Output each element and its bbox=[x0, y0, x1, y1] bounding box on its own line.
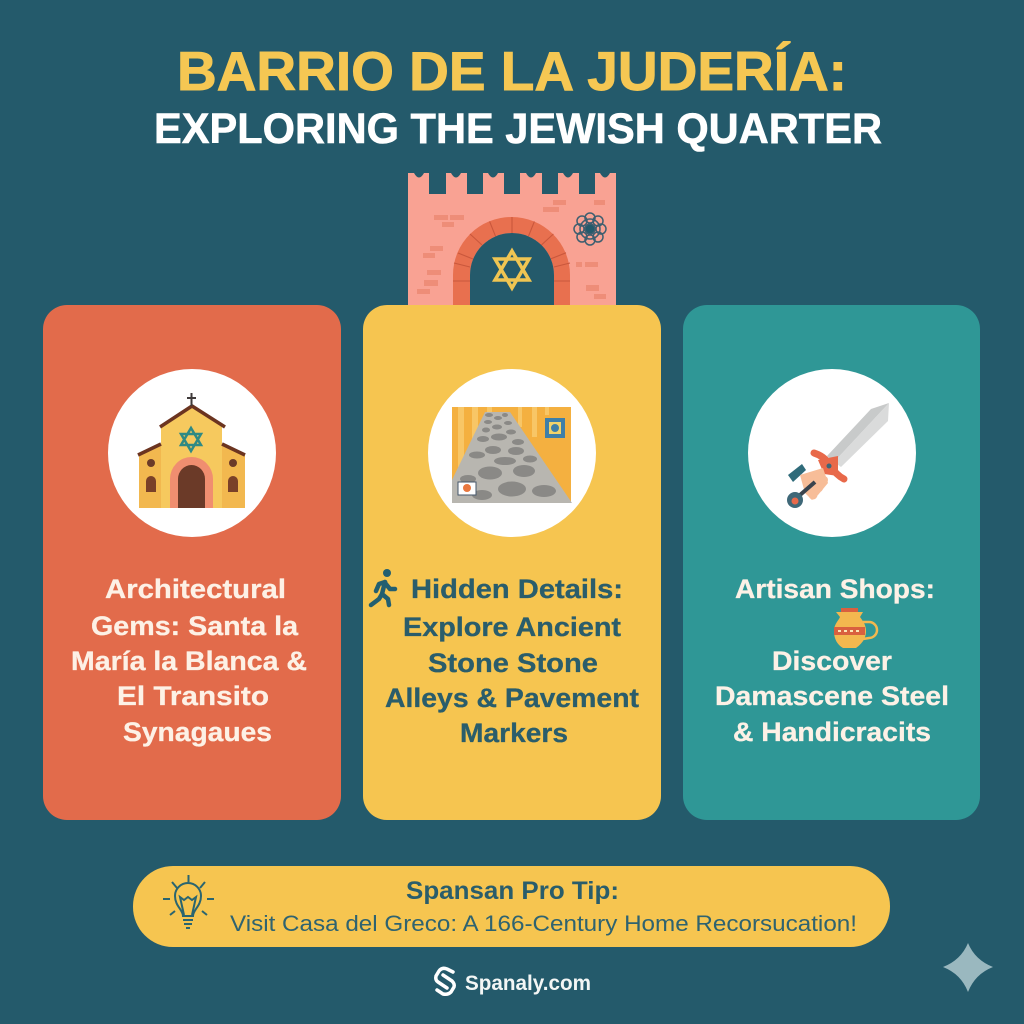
text: architectural gems bbox=[71, 574, 307, 747]
text: pro tip: Visit Casa del Greco: A 166-Century Home Recorsucation! bbox=[230, 911, 857, 936]
text: hidden details: Alleys & Pavement bbox=[385, 683, 639, 713]
logo: Spanaly.com: Spanaly.com bbox=[465, 971, 591, 995]
icon: star of David bbox=[495, 251, 529, 288]
text: hidden details: Stone Stone bbox=[428, 648, 598, 678]
panel: architectural gems bbox=[43, 305, 341, 820]
text: artisan shops: Artisan Shops: bbox=[735, 574, 935, 604]
title bbox=[154, 40, 882, 153]
text: hidden details: Explore Ancient bbox=[403, 612, 621, 642]
text: hidden details bbox=[385, 574, 639, 748]
icon: light bulb bbox=[163, 875, 214, 928]
text: architectural gems: Gems: Santa la bbox=[91, 611, 299, 641]
panel: hidden details bbox=[363, 305, 661, 820]
text: artisan shops: Damascene Steel bbox=[715, 681, 949, 711]
text: architectural gems: Synagaues bbox=[123, 717, 272, 747]
text: pro tip: Spansan Pro Tip: bbox=[406, 877, 619, 905]
arch bbox=[453, 217, 570, 305]
text: architectural gems: María la Blanca & bbox=[71, 646, 307, 676]
text: artisan shops bbox=[715, 574, 949, 747]
text: hidden details: Markers bbox=[460, 718, 568, 748]
text: architectural gems: Architectural bbox=[105, 574, 286, 604]
panel: artisan shops bbox=[683, 305, 980, 820]
icon: geometric rosette bbox=[574, 213, 606, 245]
text: artisan shops: & Handicracits bbox=[733, 717, 931, 747]
icon: synagogue bbox=[108, 369, 276, 537]
icon: jug bbox=[834, 608, 877, 648]
text: hidden details: Hidden Details: bbox=[411, 574, 623, 604]
callout: pro tip bbox=[133, 866, 890, 947]
text: pro tip bbox=[230, 877, 857, 936]
icon: running figure bbox=[371, 569, 395, 605]
illustration: gate wall bbox=[408, 173, 616, 306]
decoration: sparkle bbox=[943, 943, 993, 992]
icon: cobbled alley bbox=[428, 369, 596, 537]
title: BARRIO DE LA JUDERÍA: bbox=[177, 40, 847, 102]
text: artisan shops: Discover bbox=[772, 646, 893, 676]
text: architectural gems: El Transito bbox=[117, 681, 269, 711]
icon: damascene sword bbox=[748, 369, 916, 537]
title: EXPLORING THE JEWISH QUARTER bbox=[154, 105, 882, 153]
